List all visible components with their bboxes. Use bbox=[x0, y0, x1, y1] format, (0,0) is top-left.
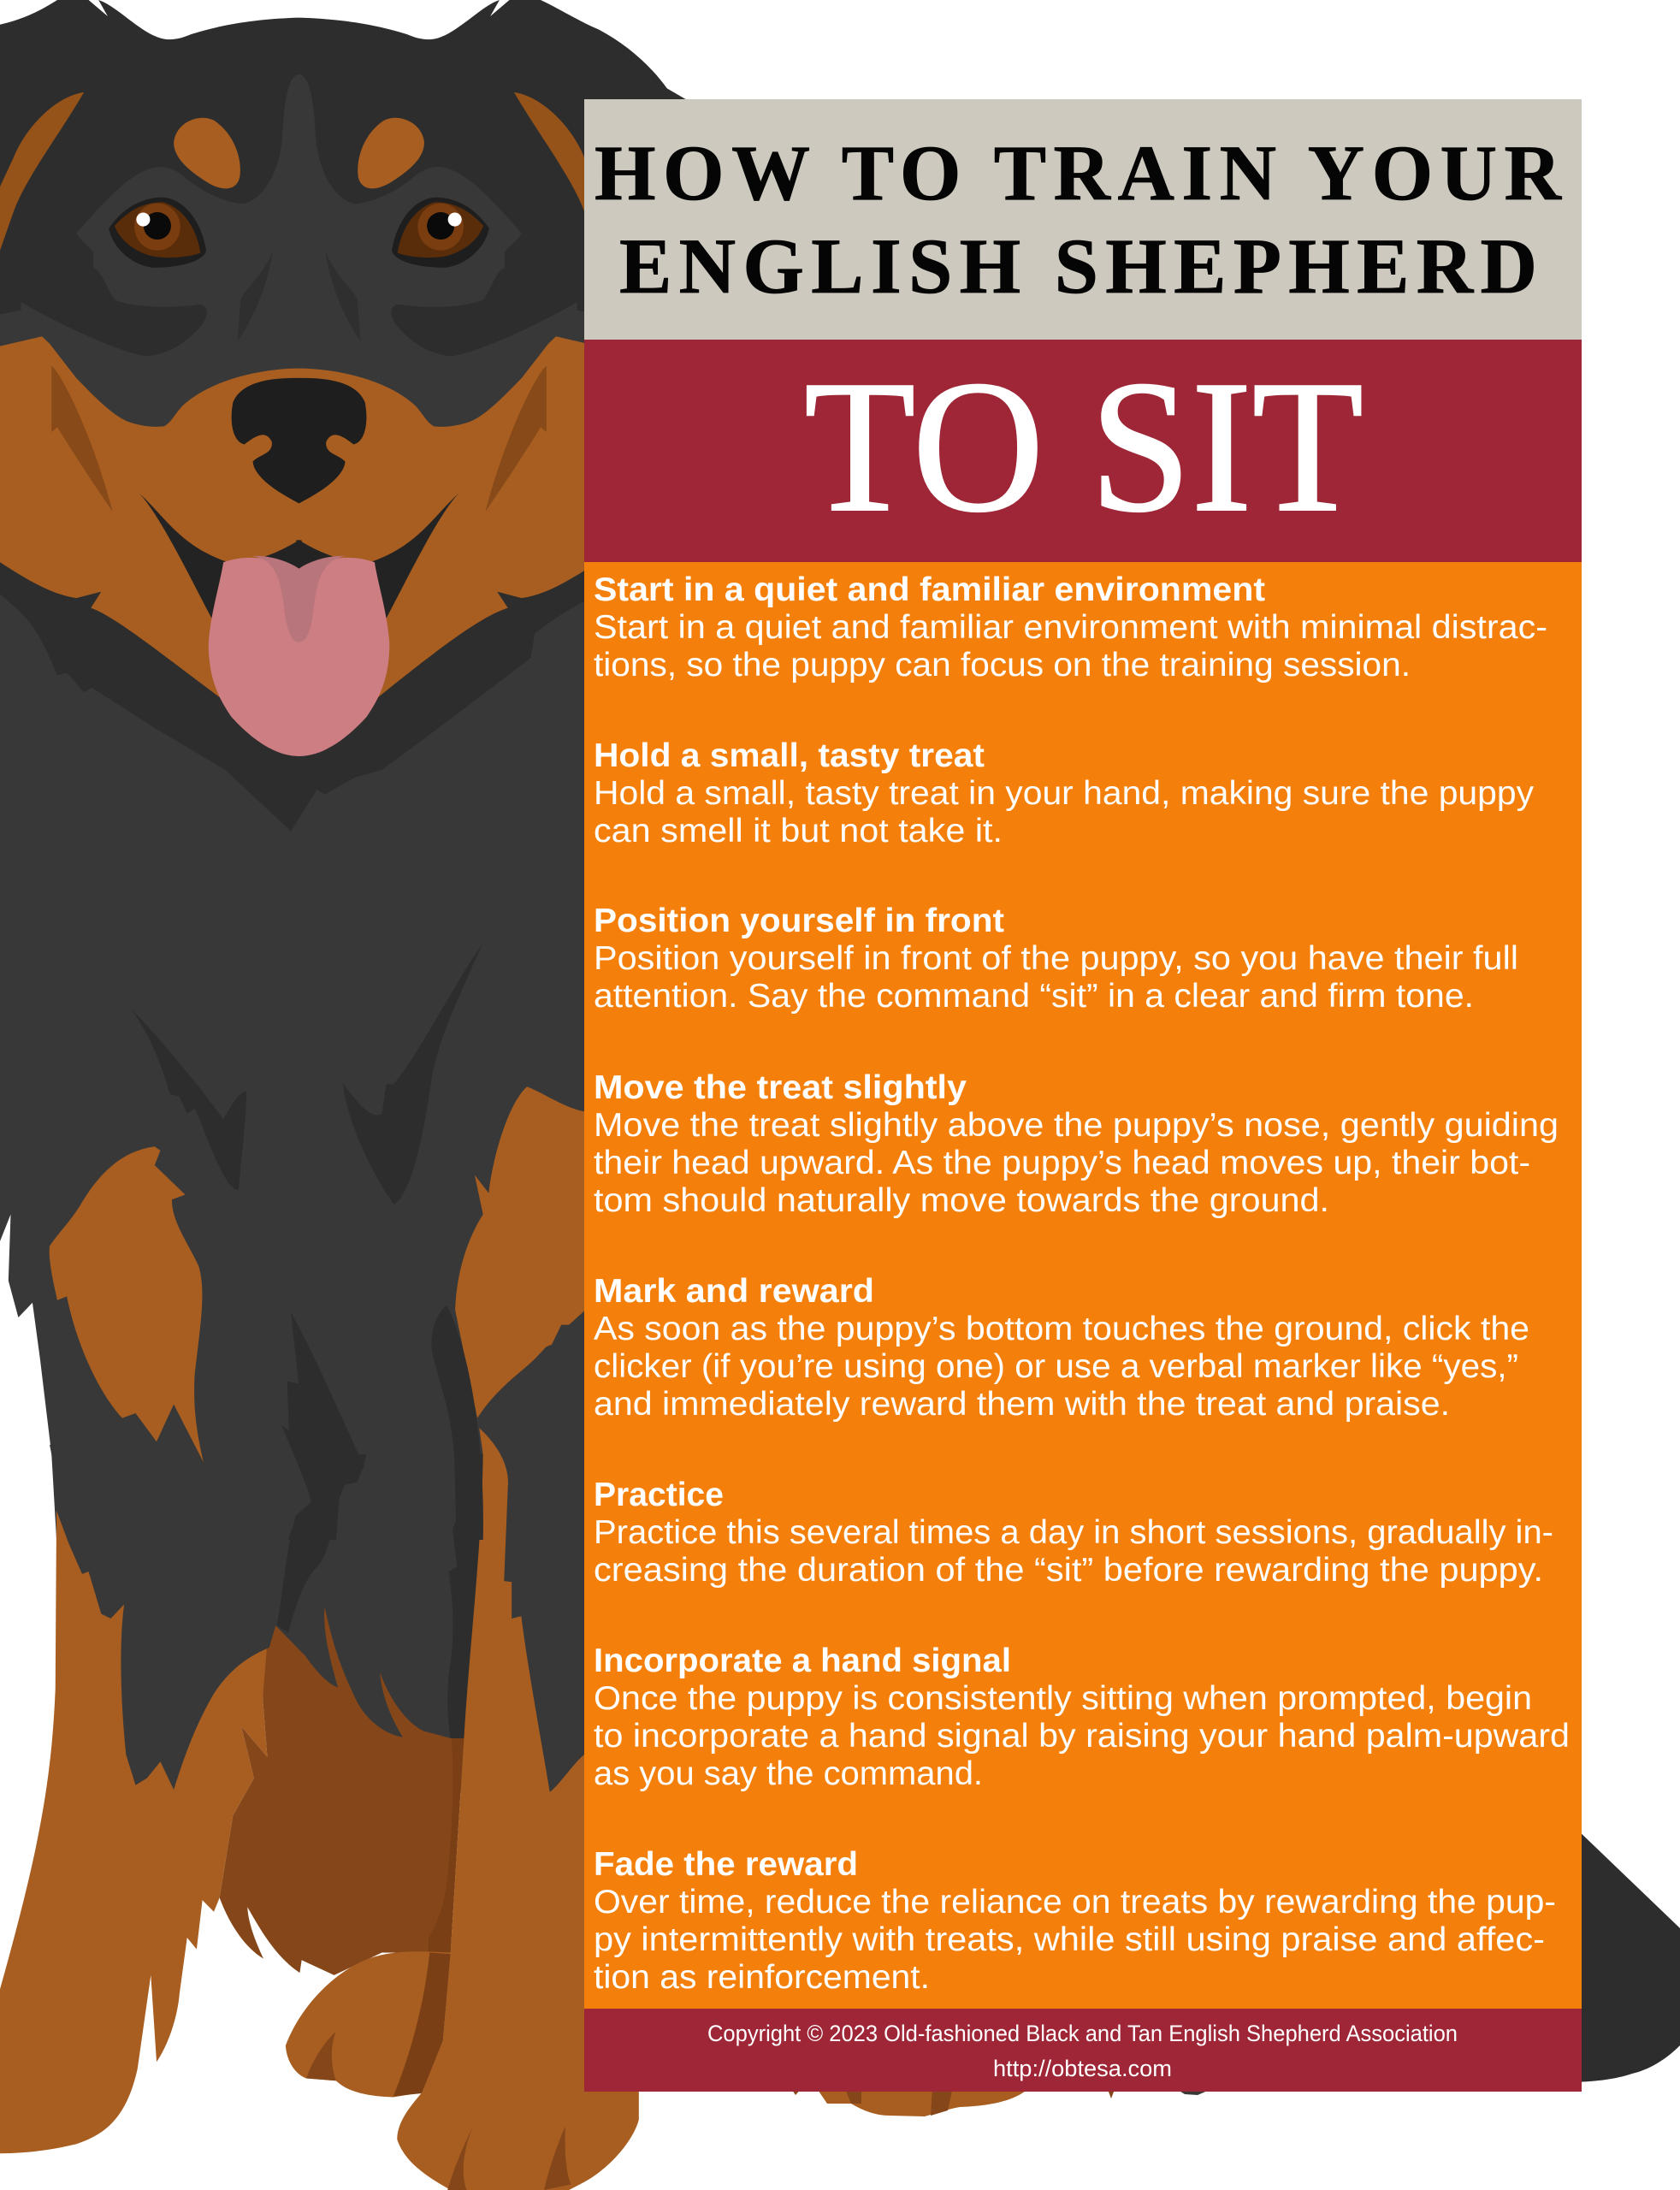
step: position yourself: Position yourself in front bbox=[594, 903, 1004, 939]
right paw toes bbox=[447, 2127, 473, 2190]
eye highlight bbox=[136, 213, 150, 227]
panel: footer band bbox=[584, 2009, 1582, 2092]
heading: how to train: HOW TO TRAIN YOUR bbox=[595, 129, 1563, 216]
back paw stripe bbox=[393, 1953, 451, 2096]
step: fade the reward: py intermittently with treats, while still using praise and affec- bbox=[594, 1921, 1545, 1958]
eye iris background bbox=[115, 202, 200, 257]
step: hand signal: Incorporate a hand signal bbox=[594, 1642, 1011, 1679]
right leg bbox=[397, 1428, 639, 2190]
dark coat behind right leg bbox=[458, 1445, 590, 1792]
step: position yourself bbox=[594, 903, 1518, 1015]
footer text bbox=[707, 2021, 1458, 2081]
step: position yourself: attention. Say the command “sit” in a clear and firm tone. bbox=[594, 978, 1474, 1015]
eye ring bbox=[134, 204, 180, 251]
step: tasty treat: Hold a small, tasty treat in your hand, making sure the puppy bbox=[594, 775, 1535, 812]
heading: how to train: ENGLISH SHEPHERD bbox=[619, 222, 1537, 310]
fur streak left bbox=[132, 1009, 246, 1190]
step: hand signal: to incorporate a hand signal by raising your hand palm-upward bbox=[594, 1718, 1570, 1755]
ear streak bbox=[0, 92, 84, 251]
step: move the treat: their head upward. As the puppy’s head moves up, their bot- bbox=[594, 1145, 1530, 1181]
step: mark and reward: and immediately reward them with the treat and praise. bbox=[594, 1386, 1450, 1423]
step: move the treat: Move the treat slightly above the puppy’s nose, gently guiding bbox=[594, 1107, 1559, 1144]
step: quiet environment: Start in a quiet and familiar environment bbox=[594, 571, 1265, 608]
eye socket bbox=[109, 198, 206, 268]
left front leg bbox=[0, 1454, 271, 2153]
step: tasty treat: can smell it but not take it. bbox=[594, 813, 1003, 849]
pupil bbox=[144, 212, 171, 240]
face mask bbox=[0, 74, 302, 427]
mouth half bbox=[139, 494, 302, 619]
heading: to sit: TO SIT bbox=[804, 341, 1364, 551]
step: position yourself: Position yourself in front of the puppy, so you have their full bbox=[594, 940, 1518, 977]
step: fade the reward: Fade the reward bbox=[594, 1846, 858, 1883]
step: fade the reward: Over time, reduce the reliance on treats by rewarding the pup- bbox=[594, 1884, 1556, 1921]
step: move the treat: Move the treat slightly bbox=[594, 1069, 967, 1106]
eyebrow spot bbox=[174, 118, 240, 188]
half face: left bbox=[0, 74, 302, 619]
tongue centre shadow bbox=[252, 556, 346, 642]
half face: right mirrored bbox=[296, 74, 598, 619]
heading: how to train bbox=[595, 129, 1563, 310]
step: hand signal: as you say the command. bbox=[594, 1755, 983, 1792]
back paw toe bbox=[306, 2032, 336, 2080]
tan muzzle and cheeks bbox=[0, 329, 599, 737]
centre belly streak bbox=[281, 1312, 364, 1540]
step: mark and reward: As soon as the puppy’s bottom touches the ground, click the bbox=[594, 1311, 1529, 1347]
panel: orange steps bbox=[584, 562, 1582, 2009]
muzzle shadow streak bbox=[238, 251, 273, 341]
step: tasty treat: Hold a small, tasty treat bbox=[594, 737, 985, 774]
step: practice bbox=[594, 1477, 1553, 1589]
belly dark fur bbox=[50, 1445, 496, 1790]
chest fur details bbox=[50, 945, 588, 1540]
step: tasty treat bbox=[594, 737, 1535, 849]
right foreleg tan patch bbox=[455, 1086, 588, 1418]
step: practice: Practice bbox=[594, 1477, 724, 1513]
left foreleg tan patch bbox=[50, 1146, 204, 1462]
cheek streak bbox=[51, 366, 113, 512]
head dark top silhouette bbox=[0, 0, 688, 393]
step: quiet environment bbox=[594, 571, 1547, 684]
step: quiet environment: Start in a quiet and familiar environment with minimal distrac- bbox=[594, 609, 1547, 646]
step: hand signal: Once the puppy is consistently sitting when prompted, begin bbox=[594, 1680, 1532, 1717]
haunch stripe bbox=[429, 1738, 464, 1953]
step: mark and reward: clicker (if you’re using one) or use a verbal marker like “yes,” bbox=[594, 1348, 1518, 1385]
paw tips below panel bbox=[790, 2087, 1216, 2116]
footer text: http://obtesa.com bbox=[993, 2056, 1172, 2081]
fur streak right bbox=[342, 945, 482, 1204]
dog body upper dark coat bbox=[0, 573, 611, 1540]
step: move the treat bbox=[594, 1069, 1559, 1219]
step: move the treat: tom should naturally move towards the ground. bbox=[594, 1182, 1329, 1219]
haunch bbox=[220, 1595, 468, 1975]
panel: content card bbox=[584, 99, 1582, 2092]
side dark streak bbox=[431, 1305, 483, 1540]
footer text: Copyright © 2023 Old-fashioned Black and Tan English Shepherd Association bbox=[707, 2021, 1458, 2046]
step: fade the reward: tion as reinforcement. bbox=[594, 1959, 930, 1996]
centre darker stripe bbox=[277, 1454, 367, 1632]
step: mark and reward: Mark and reward bbox=[594, 1273, 874, 1310]
dog legs and haunch bbox=[0, 1428, 639, 2190]
tongue bbox=[209, 558, 389, 756]
darker vertical stripe bbox=[447, 1454, 483, 1738]
step: practice: Practice this several times a day in short sessions, gradually in- bbox=[594, 1514, 1553, 1551]
panel: title band bbox=[584, 99, 1582, 340]
panel: red subject band bbox=[584, 340, 1582, 562]
back paw bbox=[286, 1951, 451, 2097]
step: quiet environment: tions, so the puppy can focus on the training session. bbox=[594, 647, 1411, 684]
step: fade the reward bbox=[594, 1846, 1556, 1996]
step: practice: creasing the duration of the “sit” before rewarding the puppy. bbox=[594, 1552, 1543, 1589]
nose half bbox=[232, 378, 302, 503]
step: mark and reward bbox=[594, 1273, 1529, 1423]
dog tail bbox=[1574, 1826, 1680, 2082]
collar dark band bbox=[0, 540, 599, 832]
step: hand signal bbox=[594, 1642, 1570, 1792]
dog head bbox=[0, 0, 688, 832]
